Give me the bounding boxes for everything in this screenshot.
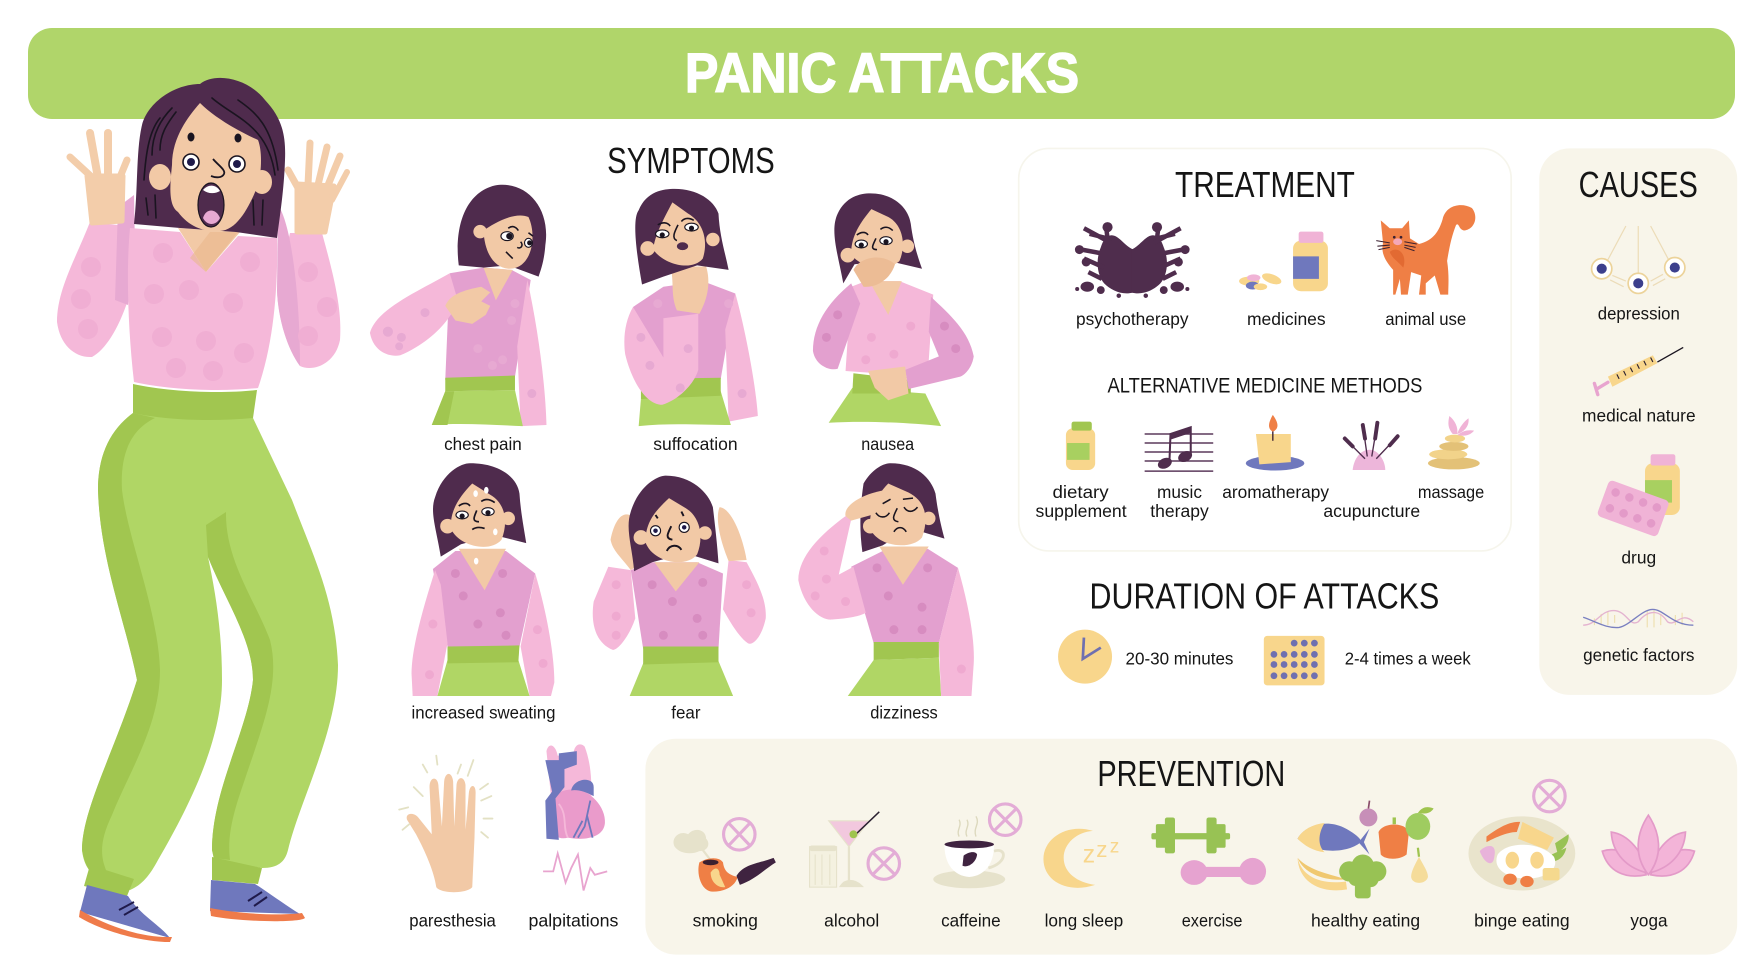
label: nausea: nausea	[861, 434, 914, 454]
label: exercise	[1182, 911, 1242, 931]
label: massage	[1418, 482, 1484, 502]
panel: causes	[1539, 148, 1737, 695]
label: 2-4 times a week	[1345, 649, 1471, 669]
icon: moon	[1043, 829, 1119, 888]
icon: bottle and pills	[1239, 232, 1328, 291]
symptom: palpitations	[528, 744, 619, 931]
label: healthy eating	[1311, 911, 1420, 931]
sleeves	[57, 195, 340, 368]
label: fear: fear	[671, 702, 701, 722]
mouth	[198, 183, 224, 227]
nose	[211, 159, 224, 177]
icon: forbidden sign	[989, 804, 1021, 835]
icon: moon: z	[1096, 837, 1108, 862]
symptom: chest pain	[370, 185, 546, 454]
label: medicines	[1247, 309, 1326, 329]
icon: music staff	[1145, 427, 1213, 471]
torso	[128, 228, 277, 390]
item: 2-4 times a week	[1264, 636, 1471, 685]
left shoe	[79, 885, 172, 942]
label: drug	[1621, 547, 1656, 567]
main figure: panicking woman	[57, 78, 347, 942]
heading: prevention: PREVENTION	[1097, 753, 1285, 794]
heading: symptoms: SYMPTOMS	[607, 140, 775, 181]
icon: needles	[1345, 423, 1398, 470]
label: 20-30 minutes	[1126, 649, 1234, 669]
label: aromatherapy	[1222, 482, 1329, 502]
item: massage	[1418, 416, 1484, 502]
icon: inkblot	[1075, 222, 1190, 298]
subheading: alternative medicine methods: ALTERNATIVE MEDICINE METHODS	[1108, 374, 1422, 397]
symptom: nausea	[813, 193, 974, 454]
label: animal use	[1385, 309, 1466, 329]
panel: symptoms	[370, 140, 974, 931]
icon: pink dumbbell	[1181, 858, 1266, 885]
icon: syringe	[1594, 347, 1683, 395]
forbidden sign	[1534, 780, 1565, 812]
label: genetic factors	[1583, 645, 1695, 665]
item: animal use	[1376, 205, 1475, 329]
icon: forbidden sign	[724, 819, 755, 850]
label: alcohol	[824, 911, 879, 931]
item: dietary supplement	[1036, 422, 1127, 521]
label: caffeine	[941, 911, 1001, 931]
icon: tingling hand	[399, 756, 492, 892]
icon: lotus	[1602, 815, 1694, 876]
label: chest pain: chest pain	[444, 434, 522, 454]
icon: pipe	[674, 830, 776, 892]
hair	[134, 78, 285, 238]
icon: calendar	[1264, 636, 1325, 685]
item: yoga	[1602, 815, 1694, 931]
face	[170, 103, 261, 231]
symptom: fear	[593, 476, 766, 722]
item: long sleep	[1043, 829, 1123, 931]
label: long sleep	[1045, 911, 1123, 931]
icon: plate of food	[1468, 816, 1575, 891]
title: PANIC ATTACKS	[685, 41, 1079, 104]
label: dizziness: dizziness	[870, 702, 938, 722]
label: medical nature	[1582, 406, 1696, 426]
icon: clock	[1058, 630, 1112, 684]
icon: stones	[1428, 416, 1480, 469]
icon: moon: z	[1083, 841, 1095, 868]
item: binge eating	[1468, 780, 1575, 931]
symptom: suffocation	[624, 189, 758, 454]
item: alcohol	[810, 812, 900, 931]
item: dietary supplement: supplement	[1036, 501, 1127, 521]
panel: treatment	[1019, 148, 1511, 551]
item: drug	[1597, 454, 1680, 567]
header banner	[28, 28, 1735, 119]
waistband	[133, 384, 257, 420]
cuffs	[84, 857, 262, 896]
icon: dna	[1583, 609, 1693, 628]
heading: treatment: TREATMENT	[1175, 164, 1355, 205]
item: acupuncture	[1323, 423, 1420, 521]
item: caffeine	[933, 804, 1021, 931]
item: aromatherapy	[1222, 415, 1329, 502]
icon: bottle and blister	[1597, 454, 1680, 537]
item: music therapy: therapy	[1150, 501, 1209, 521]
heading: duration: DURATION OF ATTACKS	[1090, 575, 1439, 616]
item: smoking	[674, 819, 776, 931]
symptom: paresthesia	[399, 756, 496, 931]
item: 20-30 minutes	[1058, 630, 1234, 684]
icon: candle	[1246, 415, 1304, 471]
label: dietary	[1052, 482, 1109, 502]
symptom: dizziness	[798, 463, 974, 722]
item: healthy eating	[1298, 801, 1434, 931]
panel: prevention	[645, 739, 1737, 955]
icon: forbidden sign	[868, 848, 900, 879]
item: depression	[1592, 226, 1685, 323]
label: suffocation: suffocation	[653, 434, 738, 454]
label: paresthesia: paresthesia	[409, 911, 496, 931]
icon: orange cat	[1376, 205, 1475, 295]
item: exercise	[1151, 817, 1266, 931]
icon: coffee cup	[933, 816, 1005, 888]
panel: duration of attacks	[1058, 575, 1471, 685]
label: palpitations: palpitations	[528, 911, 619, 931]
eyes	[183, 132, 245, 172]
label: binge eating	[1474, 911, 1570, 931]
right shoe	[210, 880, 305, 921]
icon: healthy food	[1298, 801, 1434, 898]
symptom: increased sweating	[412, 463, 555, 722]
item: genetic factors	[1583, 609, 1695, 665]
label: yoga	[1630, 911, 1668, 931]
hands	[70, 133, 347, 232]
icon: green bottle	[1066, 422, 1095, 470]
item: music therapy	[1145, 427, 1213, 521]
label: psychotherapy	[1076, 309, 1189, 329]
icon: ecg line	[543, 853, 607, 891]
icon: pendulum	[1592, 226, 1685, 293]
pants	[82, 413, 338, 890]
icon: heart	[545, 744, 605, 840]
label: acupuncture	[1323, 501, 1420, 521]
label: music	[1157, 482, 1202, 502]
ears	[149, 164, 272, 194]
icon: green barbell	[1151, 817, 1230, 853]
item: psychotherapy	[1075, 222, 1190, 329]
label: increased sweating: increased sweating	[412, 702, 555, 722]
item: medical nature	[1582, 347, 1696, 426]
label: depression	[1598, 303, 1680, 323]
label: smoking	[693, 911, 758, 931]
icon: cocktail and glass	[810, 812, 879, 887]
heading: causes: CAUSES	[1579, 164, 1698, 205]
icon: moon: z	[1110, 836, 1119, 857]
item: medicines	[1239, 232, 1328, 329]
